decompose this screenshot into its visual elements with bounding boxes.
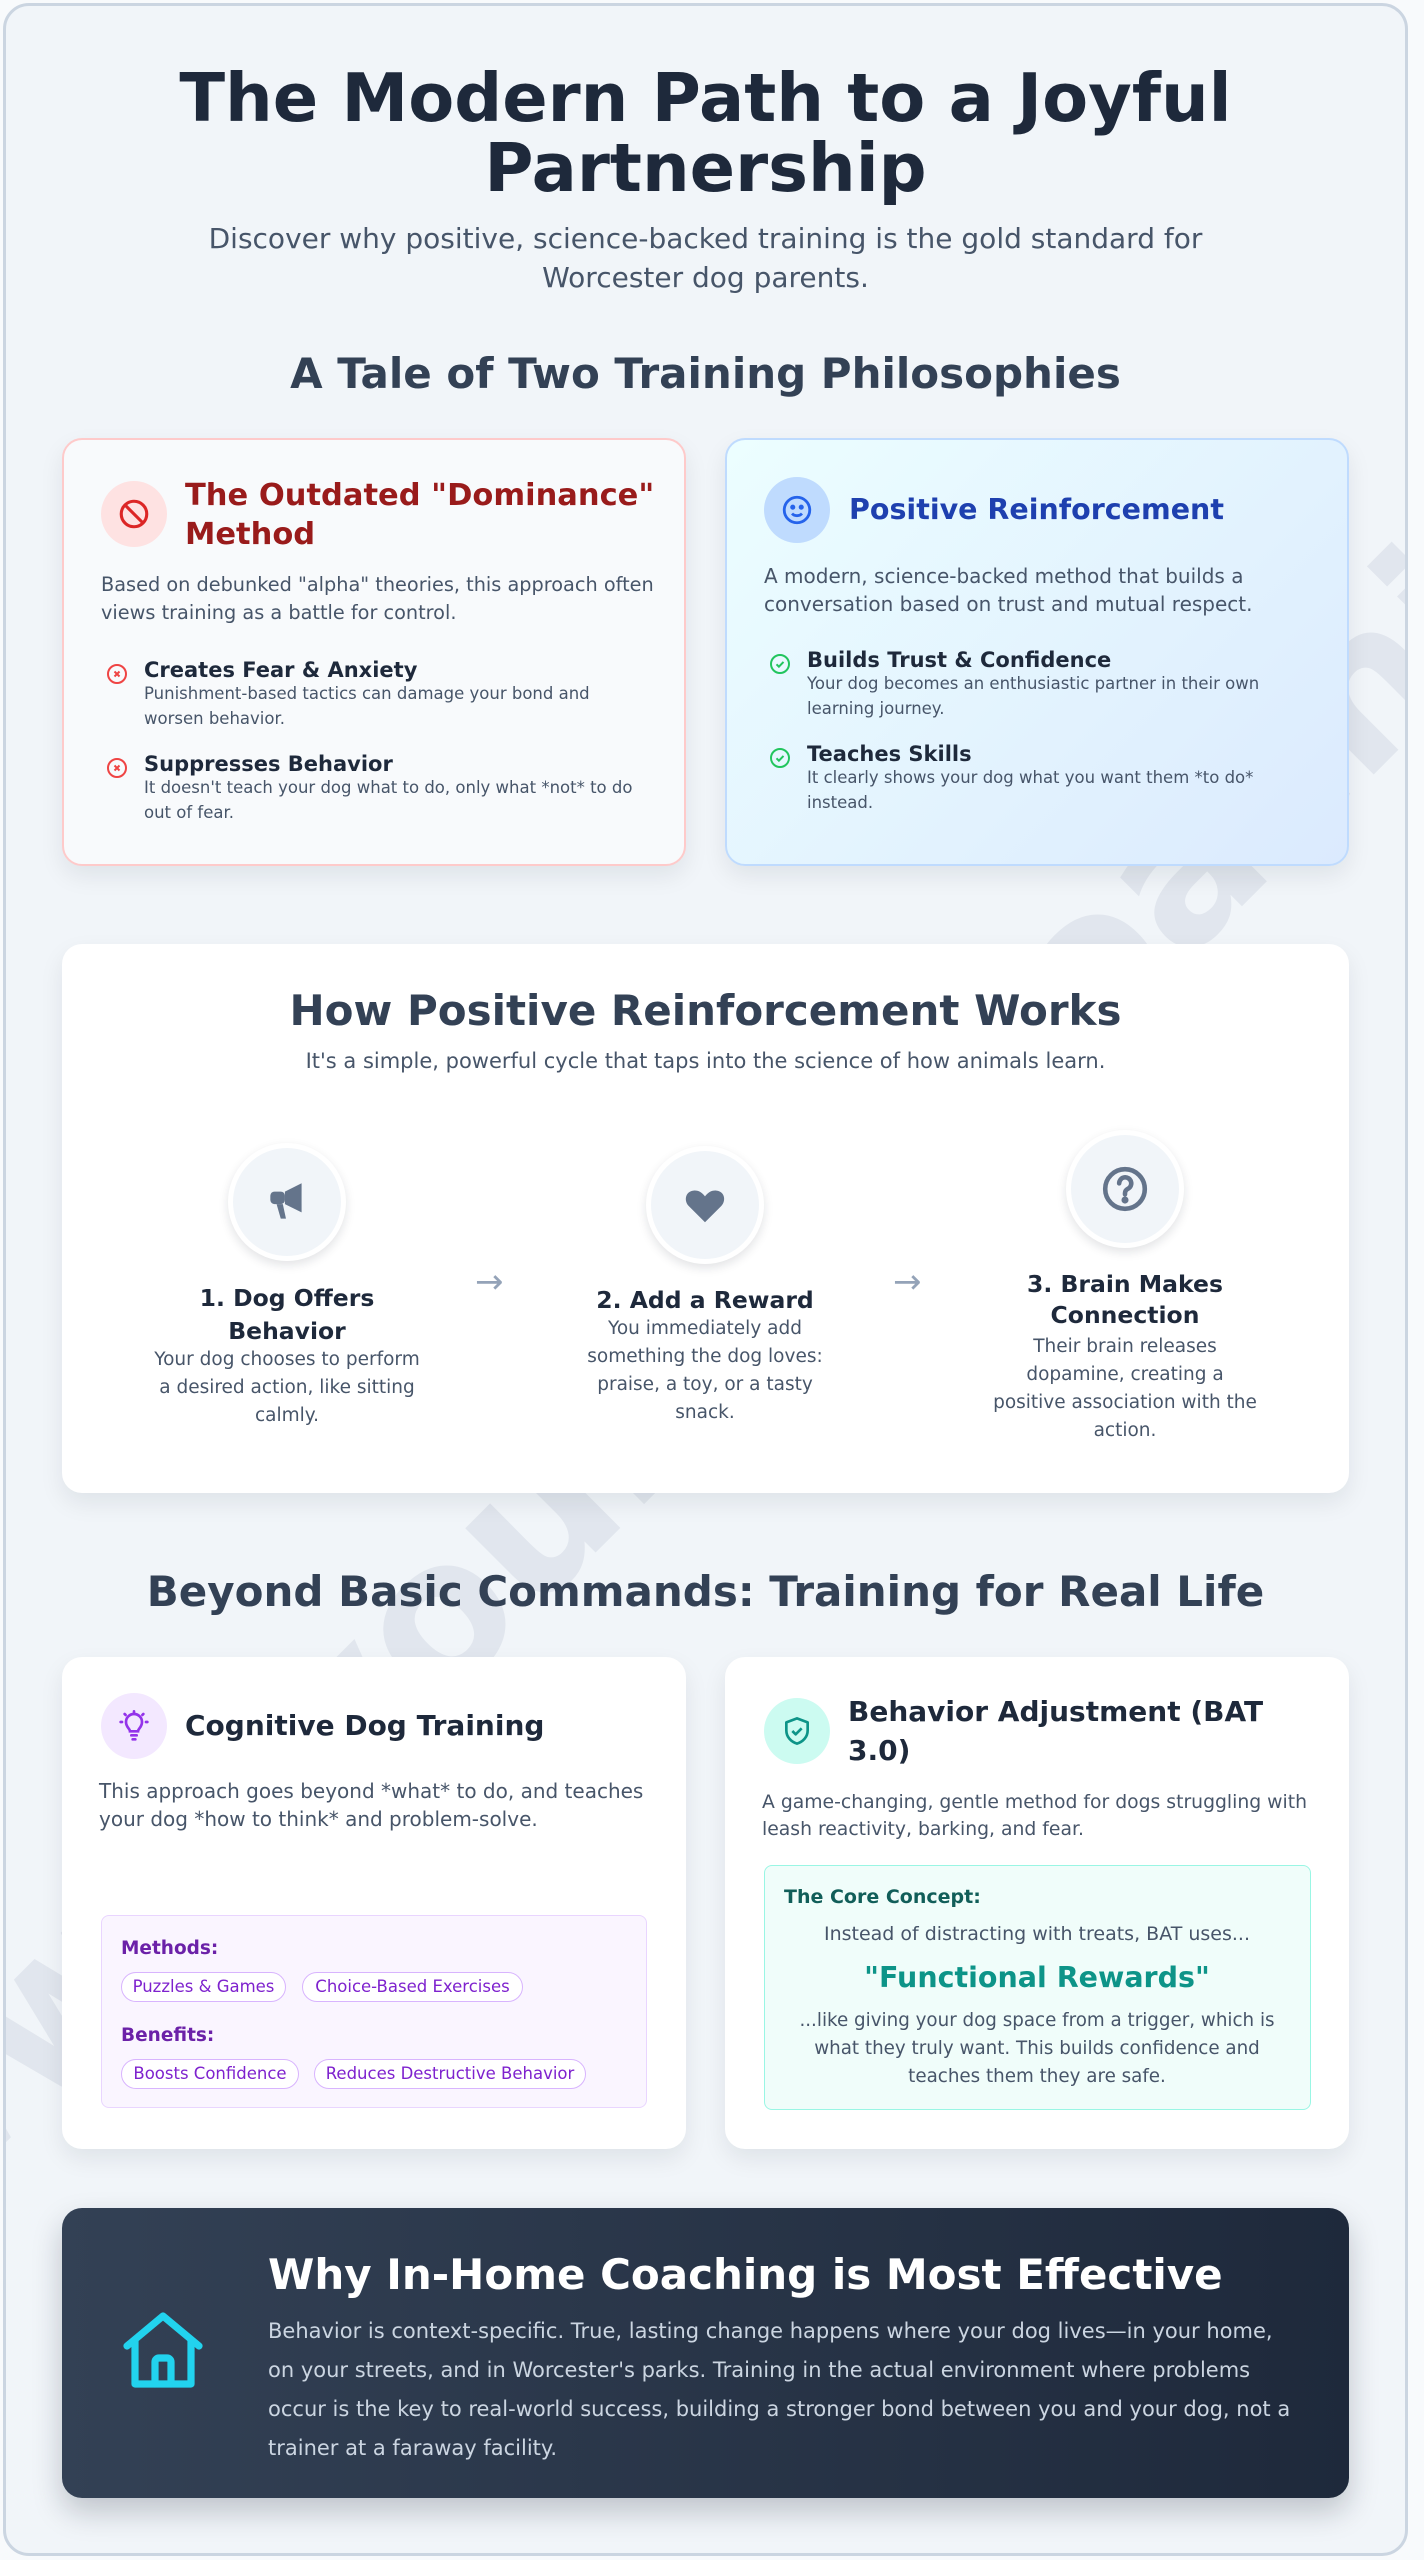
card description: [764, 564, 1253, 616]
icon: check circle: [770, 748, 790, 768]
item: fear: Punishment-based tactics can damage your bond and: [144, 684, 590, 703]
heading: beyond basic commands: Beyond Basic Commands: Training for Real Life: [147, 1567, 1264, 1616]
card title: 3.0): [848, 1734, 910, 1767]
card title: Behavior Adjustment (BAT: [848, 1695, 1263, 1728]
banner text: on your streets, and in Worcester's parks. Training in the actual environment where problems: [268, 2358, 1250, 2382]
card title: Cognitive Dog Training: [185, 1709, 544, 1742]
step 3: Connection: [1051, 1301, 1199, 1329]
step 1: 1. Dog Offers: [200, 1284, 374, 1312]
step 3: Their brain releases: [1033, 1336, 1217, 1357]
card description: [98, 1779, 643, 1831]
step 1: calmly.: [255, 1405, 319, 1426]
pill: [314, 2059, 586, 2089]
banner text: [268, 2319, 1290, 2460]
pill: [121, 1972, 286, 2002]
step 3: positive association with the: [993, 1392, 1257, 1413]
item: trust: learning journey.: [807, 699, 944, 718]
icon: x circle: [107, 664, 127, 684]
card description: conversation based on trust and mutual respect.: [764, 592, 1253, 616]
step 2: snack.: [675, 1402, 735, 1423]
pill: [121, 2059, 299, 2089]
core concept box: teaches them they are safe.: [908, 2066, 1166, 2087]
title: [179, 59, 1232, 207]
panel: how it works: [62, 944, 1349, 1493]
item: fear: worsen behavior.: [144, 709, 285, 728]
panel: positive reinforcement: [725, 438, 1349, 866]
subtitle: It's a simple, powerful cycle that taps into the science of how animals learn.: [306, 1049, 1105, 1073]
step 3: [993, 1135, 1257, 1441]
banner text: trainer at a faraway facility.: [268, 2436, 557, 2460]
item: trust: [770, 648, 1259, 718]
card description: views training as a battle for control.: [101, 601, 456, 624]
subtitle: [209, 222, 1202, 294]
icon: megaphone: [228, 1143, 346, 1261]
methods & benefits box: [101, 1915, 647, 2108]
pill: Boosts Confidence: [133, 2064, 287, 2083]
step 2: praise, a toy, or a tasty: [597, 1374, 813, 1395]
subtitle: Worcester dog parents.: [542, 261, 869, 294]
card title: The Outdated "Dominance": [185, 478, 654, 513]
core concept box: The Core Concept:: [784, 1886, 981, 1908]
banner title: Why In-Home Coaching is Most Effective: [268, 2250, 1223, 2299]
banner text: Behavior is context-specific. True, lasting change happens where your dog lives—in your home,: [268, 2319, 1273, 2343]
card title: Positive Reinforcement: [849, 493, 1224, 526]
step 1: Behavior: [228, 1317, 346, 1345]
panel: cognitive dog training: [62, 1657, 686, 2149]
item: suppresses: out of fear.: [144, 803, 234, 822]
title: The Modern Path to a Joyful: [179, 59, 1232, 137]
item: skills: Teaches Skills: [807, 742, 972, 766]
item: suppresses: [107, 752, 632, 822]
arrow: →: [893, 1262, 922, 1302]
step 1: Your dog chooses to perform: [154, 1349, 420, 1370]
methods & benefits box: Benefits:: [121, 2025, 214, 2046]
icon: x circle: [107, 758, 127, 778]
pill: Choice-Based Exercises: [315, 1977, 510, 1996]
methods & benefits box: Methods:: [121, 1938, 218, 1959]
step 2: something the dog loves:: [587, 1346, 823, 1367]
step 1: a desired action, like sitting: [159, 1377, 415, 1398]
item: trust: Your dog becomes an enthusiastic partner in their own: [807, 674, 1259, 693]
item: suppresses: It doesn't teach your dog what to do, only what *not* to do: [144, 778, 632, 797]
card title: [848, 1695, 1263, 1767]
icon: shield: [764, 1698, 830, 1764]
core concept box: Instead of distracting with treats, BAT uses...: [824, 1923, 1250, 1945]
card description: A modern, science-backed method that builds a: [764, 564, 1243, 588]
card title: Method: [185, 517, 315, 552]
pill: [302, 1972, 523, 2002]
card description: Based on debunked "alpha" theories, this approach often: [101, 573, 654, 596]
title: Partnership: [484, 129, 927, 207]
banner text: occur is the key to real-world success, building a stronger bond between you and your dog, not a: [268, 2397, 1290, 2421]
pill: Reduces Destructive Behavior: [326, 2064, 574, 2083]
card description: your dog *how to think* and problem-solve.: [99, 1807, 538, 1831]
step 2: You immediately add: [608, 1318, 802, 1339]
pill: Puzzles & Games: [133, 1977, 274, 1996]
icon: check circle: [770, 654, 790, 674]
item: skills: [770, 742, 1253, 812]
subtitle: Discover why positive, science-backed training is the gold standard for: [209, 222, 1202, 255]
icon: house: [123, 2312, 203, 2388]
item: fear: [107, 658, 590, 728]
card title: [185, 478, 654, 552]
heading: tale of two: A Tale of Two Training Philosophies: [290, 349, 1121, 398]
card description: leash reactivity, barking, and fear.: [762, 1819, 1084, 1840]
icon: lightbulb: [101, 1693, 167, 1759]
item: trust: Builds Trust & Confidence: [807, 648, 1111, 672]
icon: question: [1066, 1130, 1184, 1248]
step 2: 2. Add a Reward: [596, 1286, 814, 1314]
card description: [762, 1792, 1307, 1840]
heading: How Positive Reinforcement Works: [290, 986, 1121, 1035]
step 3: 3. Brain Makes: [1027, 1270, 1223, 1298]
item: suppresses: Suppresses Behavior: [144, 752, 393, 776]
core concept box: ...like giving your dog space from a trigger, which is: [799, 2010, 1275, 2031]
banner: in-home coaching: [62, 2208, 1349, 2498]
icon: heart: [646, 1146, 764, 1264]
callout: functional rewards: "Functional Rewards": [864, 1961, 1210, 1994]
item: skills: instead.: [807, 793, 873, 812]
item: fear: Creates Fear & Anxiety: [144, 658, 417, 682]
step 3: dopamine, creating a: [1026, 1364, 1224, 1385]
core concept box: what they truly want. This builds confidence and: [814, 2038, 1260, 2059]
panel: behavior adjustment: [725, 1657, 1349, 2149]
core concept box: [764, 1865, 1311, 2110]
card description: A game-changing, gentle method for dogs struggling with: [762, 1792, 1307, 1813]
card description: This approach goes beyond *what* to do, and teaches: [99, 1779, 643, 1803]
icon: smile: [764, 477, 830, 543]
icon: prohibited: [101, 481, 167, 547]
step 1: [154, 1148, 420, 1426]
item: skills: It clearly shows your dog what you want them *to do*: [807, 768, 1253, 787]
card description: [101, 573, 654, 624]
step 2: [587, 1151, 823, 1423]
step 3: action.: [1094, 1420, 1156, 1441]
panel: dominance method: [62, 438, 686, 866]
arrow: →: [475, 1262, 504, 1302]
